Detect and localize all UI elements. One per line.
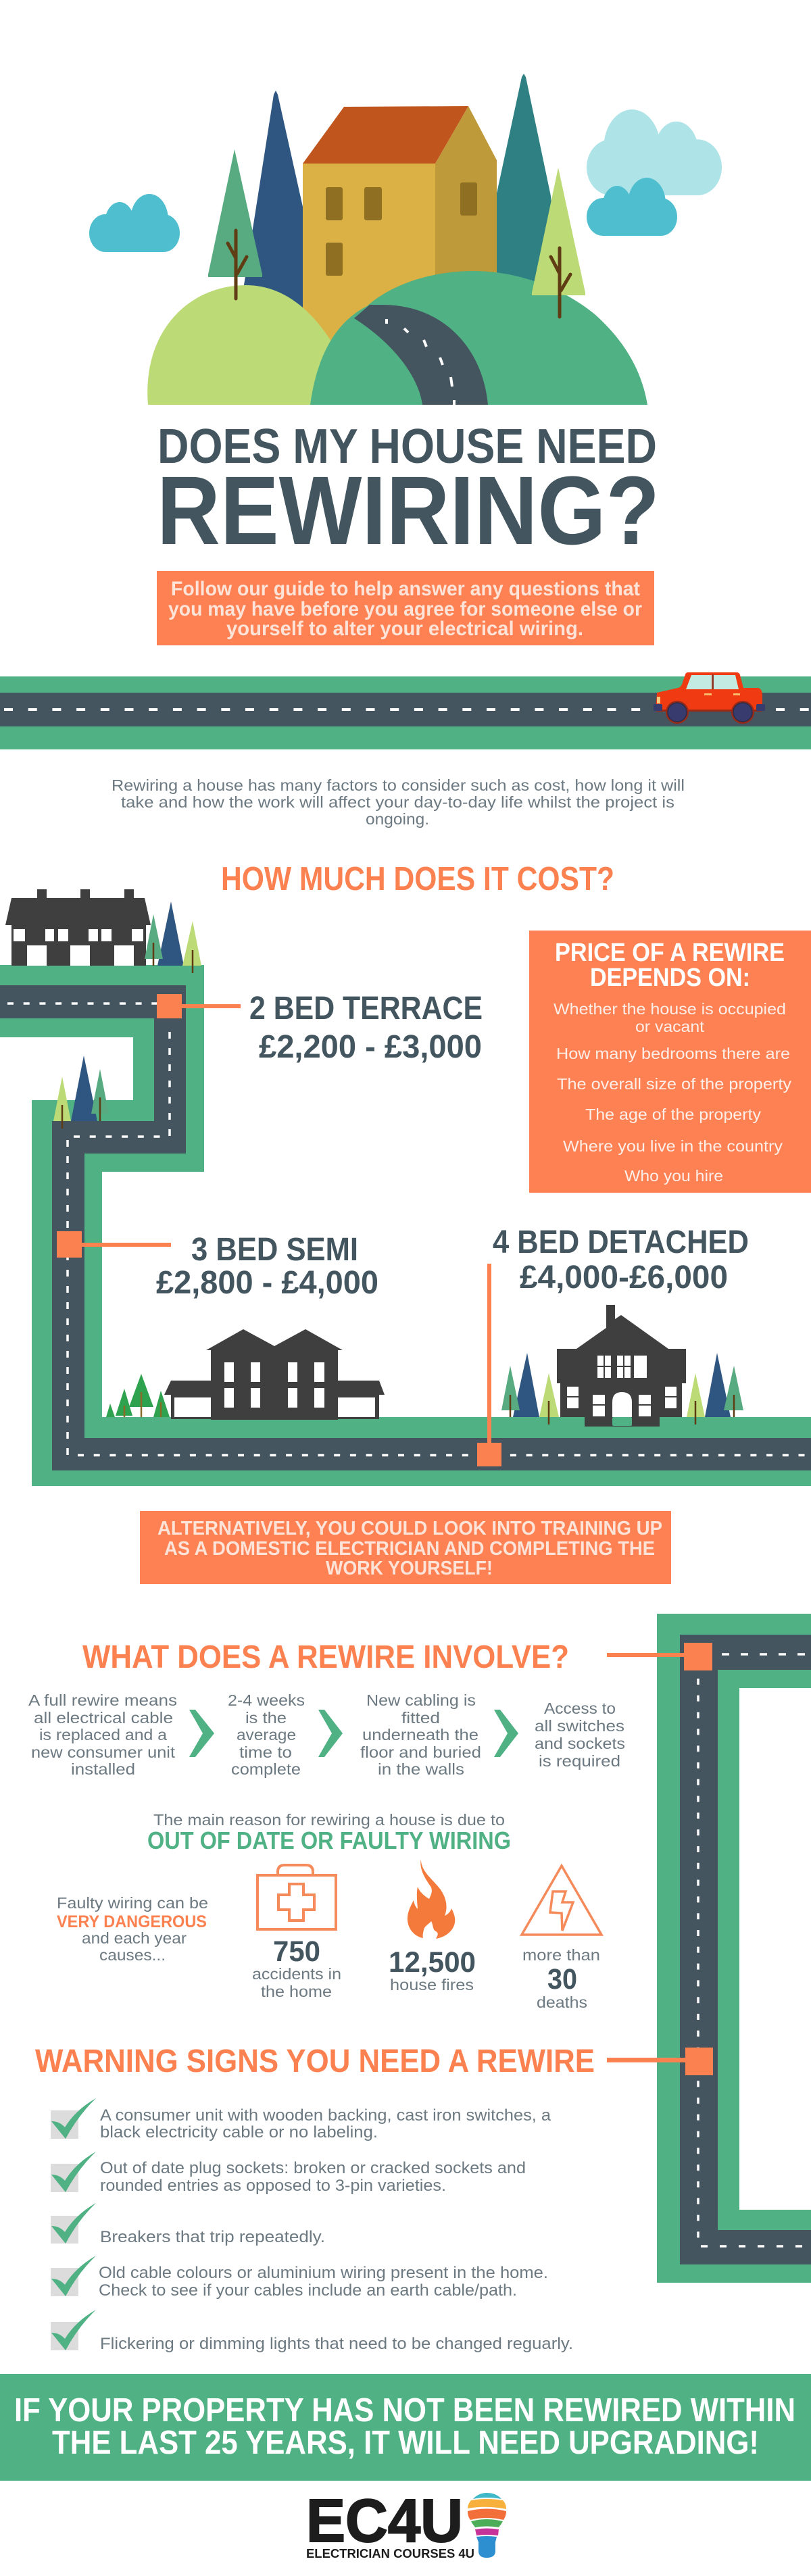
factor list: Who you hire: [624, 1167, 723, 1185]
panel heading: [555, 939, 785, 992]
step 1 text: [28, 1691, 177, 1778]
stat: 12,500 house fires: house fires: [390, 1976, 474, 1993]
step 2 text: time to: [239, 1743, 292, 1761]
icon: blue cloud right: [587, 178, 677, 236]
intro callout box: Follow our guide to help answer any questions that: [171, 578, 640, 600]
warning sign 1: A consumer unit with wooden backing, cast iron switches, a: [100, 2106, 551, 2125]
faulty wiring text: [57, 1894, 208, 1964]
warning sign 2: Out of date plug sockets: broken or cracked sockets and: [100, 2159, 526, 2177]
factor list: How many bedrooms there are: [556, 1045, 790, 1062]
marker: 3 bed semi: [57, 1231, 171, 1258]
stat: 12,500 house fires: 12,500: [389, 1946, 476, 1979]
step 1 text: is replaced and a: [39, 1726, 167, 1743]
faulty wiring text: causes...: [99, 1946, 166, 1964]
step 4 text: is required: [539, 1752, 620, 1770]
warning sign 4: [51, 2256, 548, 2300]
step 4 text: all switches: [535, 1717, 624, 1735]
winding road: right side: [657, 1614, 811, 2283]
main reason text: [147, 1811, 511, 1854]
panel: price depends on: [529, 931, 811, 1193]
winding road: cost section: [0, 965, 811, 1486]
callout: train as an electrician: AS A DOMESTIC ELECTRICIAN AND COMPLETING THE: [164, 1538, 655, 1560]
house: [303, 106, 497, 351]
heading: warning signs: WARNING SIGNS YOU NEED A REWIRE: [35, 2044, 595, 2079]
warning sign 3: Breakers that trip repeatedly.: [100, 2228, 325, 2246]
step 1 text: new consumer unit: [31, 1743, 176, 1761]
icon: pale cloud: [587, 109, 722, 195]
intro callout box: yourself to alter your electrical wiring.: [226, 618, 583, 640]
icon: trees beside detached house: [501, 1353, 743, 1425]
price label: 3 bed semi: £2,800 - £4,000: [156, 1265, 378, 1301]
marker: 2 bed terrace: [157, 994, 241, 1018]
warning sign 2: [51, 2152, 526, 2195]
panel heading: PRICE OF A REWIRE: [555, 939, 785, 967]
arrow: step 1 to 2: [189, 1710, 214, 1757]
intro paragraph: ongoing.: [366, 810, 429, 828]
arrow: step 3 to 4: [494, 1710, 518, 1757]
price label: 3 bed semi: [156, 1232, 378, 1301]
stat: 30 deaths: 30: [547, 1963, 577, 1996]
warning sign 5: Flickering or dimming lights that need to be changed reguarly.: [100, 2335, 573, 2353]
faulty wiring text: VERY DANGEROUS: [57, 1912, 207, 1931]
warning sign 4: Check to see if your cables include an earth cable/path.: [99, 2281, 517, 2300]
step 4 text: and sockets: [535, 1735, 625, 1752]
step 1 text: all electrical cable: [34, 1709, 173, 1727]
icon: blue cloud left: [89, 194, 180, 252]
stat: 30 deaths: more than: [522, 1946, 600, 1964]
warning sign 1: [51, 2098, 551, 2141]
icon: striped light bulb: [468, 2493, 506, 2558]
step 1 text: A full rewire means: [28, 1691, 177, 1709]
icon: terraced house: [5, 889, 151, 966]
stat: 750 accidents: 750: [273, 1935, 320, 1968]
icon: semi-detached house: [164, 1329, 385, 1420]
arrow: step 2 to 3: [318, 1710, 343, 1757]
stat: 30 deaths: deaths: [537, 1993, 587, 2011]
step 3 text: in the walls: [378, 1760, 464, 1778]
step 2 text: is the: [245, 1709, 287, 1727]
main reason text: The main reason for rewiring a house is due to: [153, 1811, 505, 1829]
logo: EC4U: EC4U: [306, 2487, 463, 2555]
stat: 750 accidents: accidents in: [252, 1965, 341, 1983]
callout: train as an electrician: WORK YOURSELF!: [326, 1558, 493, 1579]
stat: 30 deaths: [522, 1946, 600, 2011]
step 2 text: 2-4 weeks: [228, 1691, 305, 1709]
step 3 text: New cabling is: [366, 1691, 476, 1709]
icon: lime tree: [532, 168, 585, 317]
icon: electric warning triangle: [522, 1866, 601, 1935]
stat: 750 accidents: [252, 1935, 341, 2000]
price label: 3 bed semi: 3 BED SEMI: [191, 1232, 358, 1268]
callout: train as an electrician: ALTERNATIVELY, YOU COULD LOOK INTO TRAINING UP: [157, 1518, 662, 1539]
factor list: The age of the property: [585, 1106, 762, 1123]
faulty wiring text: and each year: [82, 1929, 187, 1947]
step 3 text: underneath the: [362, 1726, 478, 1743]
marker: 4 bed detached: [477, 1264, 501, 1466]
icon: detached house: [557, 1305, 686, 1427]
price label: 2 bed terrace: 2 BED TERRACE: [249, 991, 483, 1026]
factor list: Where you live in the country: [563, 1137, 783, 1155]
icon: trees by terrace: [145, 901, 201, 973]
title: REWIRING?: [157, 456, 660, 565]
warning sign 1: black electricity cable or no labeling.: [100, 2123, 378, 2141]
step 3 text: [360, 1691, 481, 1778]
intro callout box: you may have before you agree for someone else or: [168, 598, 642, 620]
logo: EC4U: ELECTRICIAN COURSES 4U: [306, 2547, 474, 2560]
panel heading: DEPENDS ON:: [590, 964, 750, 992]
price label: 4 bed detached: 4 BED DETACHED: [493, 1224, 749, 1260]
price label: 4 bed detached: [493, 1224, 749, 1295]
footer banner: [0, 2374, 811, 2481]
stat: 750 accidents: the home: [261, 1983, 332, 2000]
icon: trees on road bend: [53, 1056, 109, 1129]
warning sign 3: [51, 2203, 325, 2246]
icon: navy tree: [240, 91, 303, 311]
heading: how much does it cost: HOW MUCH DOES IT COST?: [221, 861, 614, 897]
warning sign 4: Old cable colours or aluminium wiring present in the home.: [99, 2264, 548, 2282]
price label: 4 bed detached: £4,000-£6,000: [520, 1260, 728, 1295]
step 3 text: floor and buried: [360, 1743, 481, 1761]
step 1 text: installed: [71, 1760, 135, 1778]
step 4 text: [535, 1700, 625, 1770]
icon: teal tree: [487, 74, 561, 318]
faulty wiring text: Faulty wiring can be: [57, 1894, 208, 1912]
step 2 text: [228, 1691, 305, 1778]
step 3 text: fitted: [401, 1709, 440, 1727]
warning sign 5: [51, 2310, 573, 2353]
marker: warning signs: [607, 2048, 713, 2075]
hill: lime: [147, 285, 345, 405]
title: [157, 420, 660, 565]
callout: train as an electrician: [140, 1511, 671, 1584]
warning sign 2: rounded entries as opposed to 3-pin varieties.: [100, 2177, 446, 2195]
road banner with car: [0, 672, 811, 749]
intro paragraph: [112, 776, 685, 828]
factor list: or vacant: [635, 1018, 705, 1035]
winding road: [354, 305, 488, 405]
step 2 text: average: [237, 1726, 296, 1743]
icon: flame: [408, 1859, 455, 1939]
factor list: Whether the house is occupied: [554, 1000, 786, 1018]
factor list: [554, 1000, 792, 1185]
icon: red car: [654, 672, 765, 724]
intro paragraph: Rewiring a house has many factors to consider such as cost, how long it will: [112, 776, 685, 794]
stat: 12,500 house fires: [389, 1946, 476, 1993]
heading: what does a rewire involve: WHAT DOES A REWIRE INVOLVE?: [82, 1639, 569, 1675]
price label: 2 bed terrace: £2,200 - £3,000: [259, 1029, 482, 1065]
marker: what does a rewire involve: [607, 1643, 712, 1670]
price label: 2 bed terrace: [249, 991, 483, 1065]
title: DOES MY HOUSE NEED: [157, 420, 657, 474]
icon: small pine trees: [106, 1374, 170, 1417]
intro callout box: [157, 571, 654, 645]
step 4 text: Access to: [544, 1700, 616, 1717]
step 2 text: complete: [231, 1760, 301, 1778]
hill: green: [310, 271, 647, 405]
hero illustration: house on hills: [89, 74, 722, 405]
factor list: The overall size of the property: [557, 1075, 792, 1093]
icon: first aid kit: [257, 1865, 336, 1929]
icon: small green tree: [208, 149, 262, 299]
main reason text: OUT OF DATE OR FAULTY WIRING: [147, 1827, 511, 1854]
intro paragraph: take and how the work will affect your day-to-day life whilst the project is: [121, 793, 674, 811]
